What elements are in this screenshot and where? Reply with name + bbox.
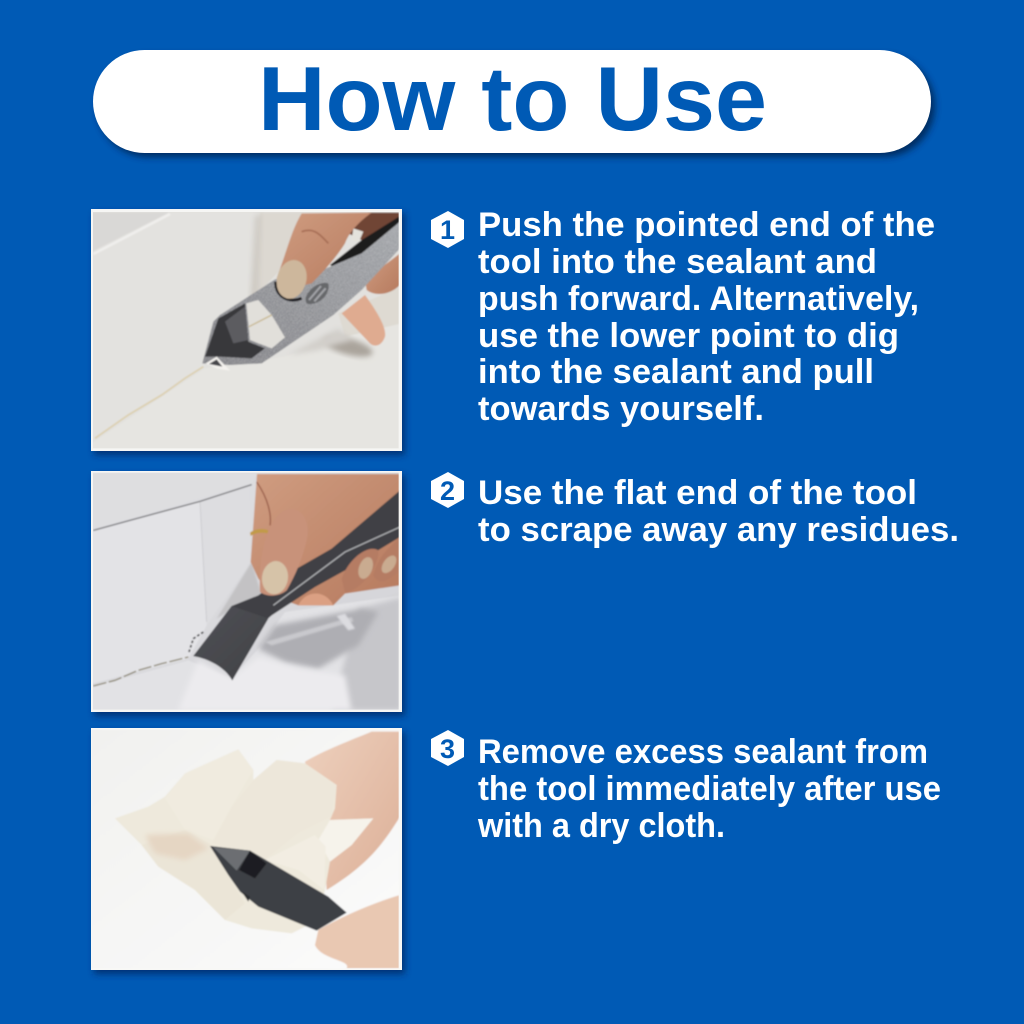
step 1 badge: [431, 211, 464, 248]
ring: [250, 529, 268, 536]
step 3 badge: [431, 730, 464, 766]
dark skin behind tool: [348, 213, 400, 243]
thumb: [315, 895, 400, 968]
step 1 text: Push the pointed end of the: [478, 206, 935, 244]
step 1 text: push forward. Alternatively,: [478, 280, 919, 318]
back fingers: [343, 548, 378, 578]
step 1 text: into the sealant and pull: [478, 353, 874, 391]
title: How to Use: [258, 49, 767, 150]
step 1 text: towards yourself.: [478, 390, 764, 428]
tool: [202, 222, 400, 365]
title banner: [93, 49, 935, 157]
thumb: [277, 213, 372, 290]
step 2 text: to scrape away any residues.: [478, 511, 959, 549]
hand top right: [305, 732, 400, 890]
step 3 badge: 3: [440, 734, 455, 764]
step 2 text: Use the flat end of the tool: [478, 474, 917, 512]
step 3 text: Remove excess sealant from: [478, 733, 928, 771]
hand: [251, 474, 400, 605]
step 3 text: with a dry cloth.: [477, 807, 725, 845]
black handle: [330, 216, 400, 268]
photo 1: pushing tool into sealant: [91, 209, 405, 455]
step 3 text: [477, 733, 941, 845]
step 2 text: [478, 474, 959, 549]
index finger: [259, 540, 306, 597]
photo 2: scraping residues: [91, 471, 405, 716]
fingers: [342, 295, 385, 346]
photo 3: wiping tool with cloth: [91, 728, 405, 974]
tool: [210, 846, 347, 931]
step 1 text: [478, 206, 935, 428]
scraper tool: [194, 490, 399, 656]
paper towel: [116, 772, 337, 934]
step 2 badge: 2: [440, 476, 455, 506]
step 2 badge: [431, 472, 464, 508]
step 3 text: the tool immediately after use: [478, 770, 941, 808]
step 1 text: use the lower point to dig: [478, 317, 899, 355]
step 1 badge: 1: [440, 215, 455, 245]
step 1 text: tool into the sealant and: [478, 243, 877, 281]
